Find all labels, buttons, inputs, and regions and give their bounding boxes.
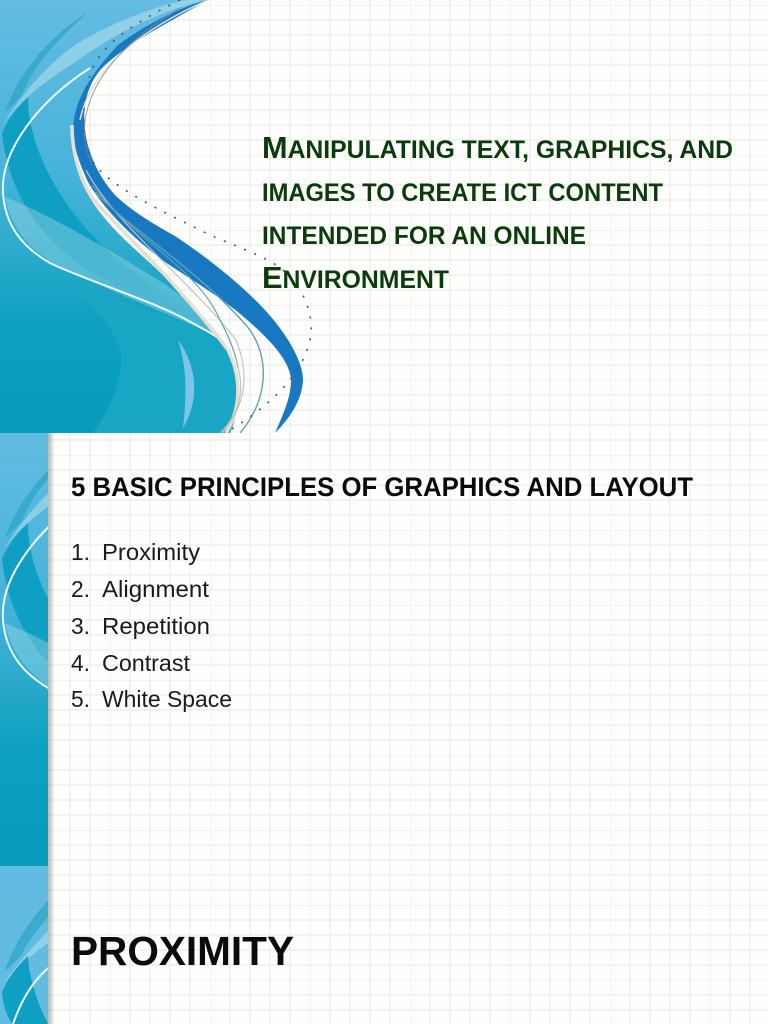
numbered list of principles: 5.: [71, 686, 90, 712]
panel: second slide left band: [0, 433, 48, 866]
numbered list of principles: White Space: [102, 686, 232, 712]
numbered list of principles: Contrast: [102, 650, 191, 676]
numbered list of principles: 2.: [71, 576, 90, 602]
title: MANIPULATING TEXT, GRAPHICS, AND: [262, 130, 733, 165]
heading: 5 basic principles: 5 BASIC PRINCIPLES OF GRAPHICS AND LAYOUT: [71, 472, 693, 502]
title: IMAGES TO CREATE ICT CONTENT: [262, 179, 663, 207]
panel: title slide wave artwork: [0, 0, 311, 433]
numbered list of principles: 3.: [71, 613, 90, 639]
numbered list of principles: Alignment: [102, 576, 210, 602]
numbered list of principles: Repetition: [102, 613, 210, 639]
numbered list of principles: [71, 539, 232, 712]
title: ENVIRONMENT: [262, 260, 449, 295]
title: INTENDED FOR AN ONLINE: [262, 222, 586, 250]
band edge shadow: [48, 433, 55, 1024]
numbered list of principles: 1.: [71, 539, 90, 565]
heading: proximity: PROXIMITY: [71, 928, 294, 974]
numbered list of principles: Proximity: [102, 539, 201, 565]
title: [262, 130, 733, 295]
panel: third slide left band: [0, 866, 48, 1024]
numbered list of principles: 4.: [71, 650, 90, 676]
